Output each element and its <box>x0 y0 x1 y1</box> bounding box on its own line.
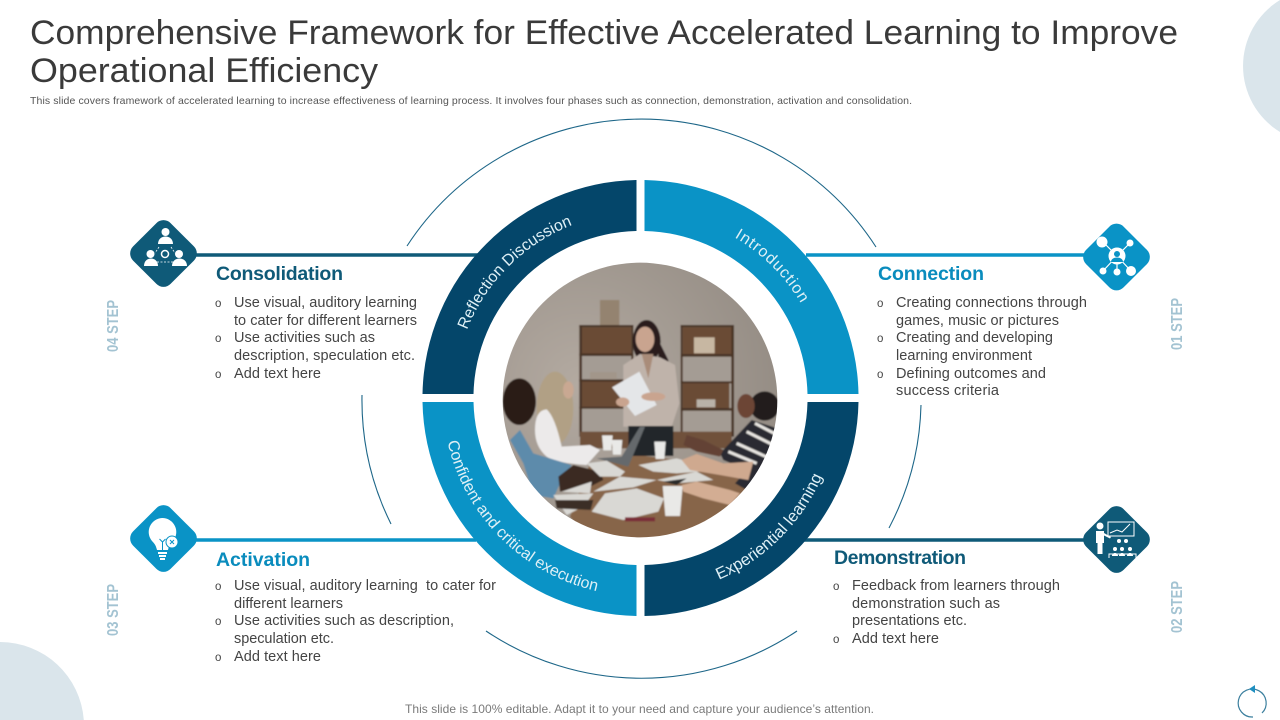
step label: 03 STEP <box>105 584 122 636</box>
panel: Consolidation <box>105 216 417 382</box>
bullet list: o <box>215 333 221 345</box>
table papers <box>553 458 720 520</box>
segment: Experiential learning <box>644 402 858 616</box>
bullet list: o <box>215 652 221 664</box>
step label: 02 STEP <box>1169 581 1186 633</box>
calculator and pen <box>555 500 593 510</box>
woman on right <box>720 420 777 490</box>
footer note: This slide is 100% editable. Adapt it to your need and capture your audience’s attention. <box>405 702 874 716</box>
bullet list: different learners <box>234 596 343 612</box>
bullet list <box>215 295 417 382</box>
step label: 01 STEP <box>1169 298 1186 350</box>
subtitle: This slide covers framework of accelerated learning to increase effectiveness of learning process. It involves four phases such as connection, demonstration, activation and consolidation. <box>30 95 912 107</box>
heading: Consolidation <box>216 263 343 285</box>
segment: Reflection Discussion <box>422 180 636 394</box>
bullet list: Defining outcomes and <box>896 366 1046 382</box>
heading: Connection <box>878 263 984 285</box>
bullet list: Feedback from learners through <box>852 578 1060 594</box>
icon: refresh arrow <box>1238 685 1266 717</box>
step label: 04 STEP <box>105 300 122 352</box>
outer thin arcs <box>362 119 921 678</box>
connector lines <box>190 255 1090 540</box>
segment: Introduction: Introduction <box>736 228 807 302</box>
segment: Reflection Discussion: Reflection Discussion <box>457 218 572 329</box>
cups <box>602 435 683 516</box>
bullet list: Add text here <box>852 631 939 647</box>
title: Comprehensive Framework for Effective Accelerated Learning to Improve <box>30 14 1178 52</box>
bullet list: success criteria <box>896 383 1000 399</box>
heading: Demonstration <box>834 547 966 569</box>
bullet list: o <box>215 369 221 381</box>
bullet list: o <box>215 298 221 310</box>
bullet list: o <box>877 369 883 381</box>
blonde woman <box>537 372 573 445</box>
bullet list: speculation etc. <box>234 631 334 647</box>
title <box>30 14 1178 90</box>
decorative circle top right <box>1243 0 1280 132</box>
panel: Activation <box>105 501 496 665</box>
icon: team gear diamond <box>126 216 201 291</box>
bullet list: Creating connections through <box>896 295 1087 311</box>
segment: Introduction <box>644 180 858 394</box>
bullet list: o <box>215 581 221 593</box>
bullet list: Add text here <box>234 649 321 665</box>
icon: light bulb diamond <box>126 501 201 576</box>
bullet list: description, speculation etc. <box>234 348 415 364</box>
bullet list <box>833 578 1060 647</box>
bullet list: learning environment <box>896 348 1032 364</box>
bullet list: Creating and developing <box>896 330 1053 346</box>
bullet list: to cater for different learners <box>234 313 417 329</box>
bullet list: o <box>833 634 839 646</box>
bullet list: Use visual, auditory learning <box>234 295 417 311</box>
icon: presenter diamond <box>1079 502 1154 577</box>
ring diagram <box>422 180 858 616</box>
bullet list: o <box>877 298 883 310</box>
panel: Connection <box>877 220 1186 399</box>
segment: Experiential learning: Experiential learning <box>715 474 824 580</box>
bullet list <box>215 578 496 665</box>
bullet list: o <box>877 333 883 345</box>
bullet list <box>877 295 1087 399</box>
bullet list: demonstration such as <box>852 596 1000 612</box>
bullet list: Use activities such as <box>234 330 375 346</box>
bullet list: Use activities such as description, <box>234 613 454 629</box>
heading: Activation <box>216 549 310 571</box>
central photo: team meeting <box>502 262 778 538</box>
bullet list: Use visual, auditory learning to cater for <box>234 578 496 594</box>
bullet list: games, music or pictures <box>896 313 1059 329</box>
title: Operational Efficiency <box>30 52 378 90</box>
presenter <box>633 320 661 363</box>
man in blue shirt <box>503 378 536 425</box>
bullet list: o <box>833 581 839 593</box>
bullet list: presentations etc. <box>852 613 967 629</box>
bullet list: o <box>215 616 221 628</box>
icon: network diamond <box>1079 220 1154 294</box>
segment: Confident and critical execution <box>422 402 636 616</box>
segment: Confident and critical execution: Confident and critical execution <box>448 440 598 591</box>
decorative circle bottom left <box>0 642 84 720</box>
panel: Demonstration <box>833 502 1186 647</box>
bullet list: Add text here <box>234 366 321 382</box>
table <box>570 455 747 543</box>
